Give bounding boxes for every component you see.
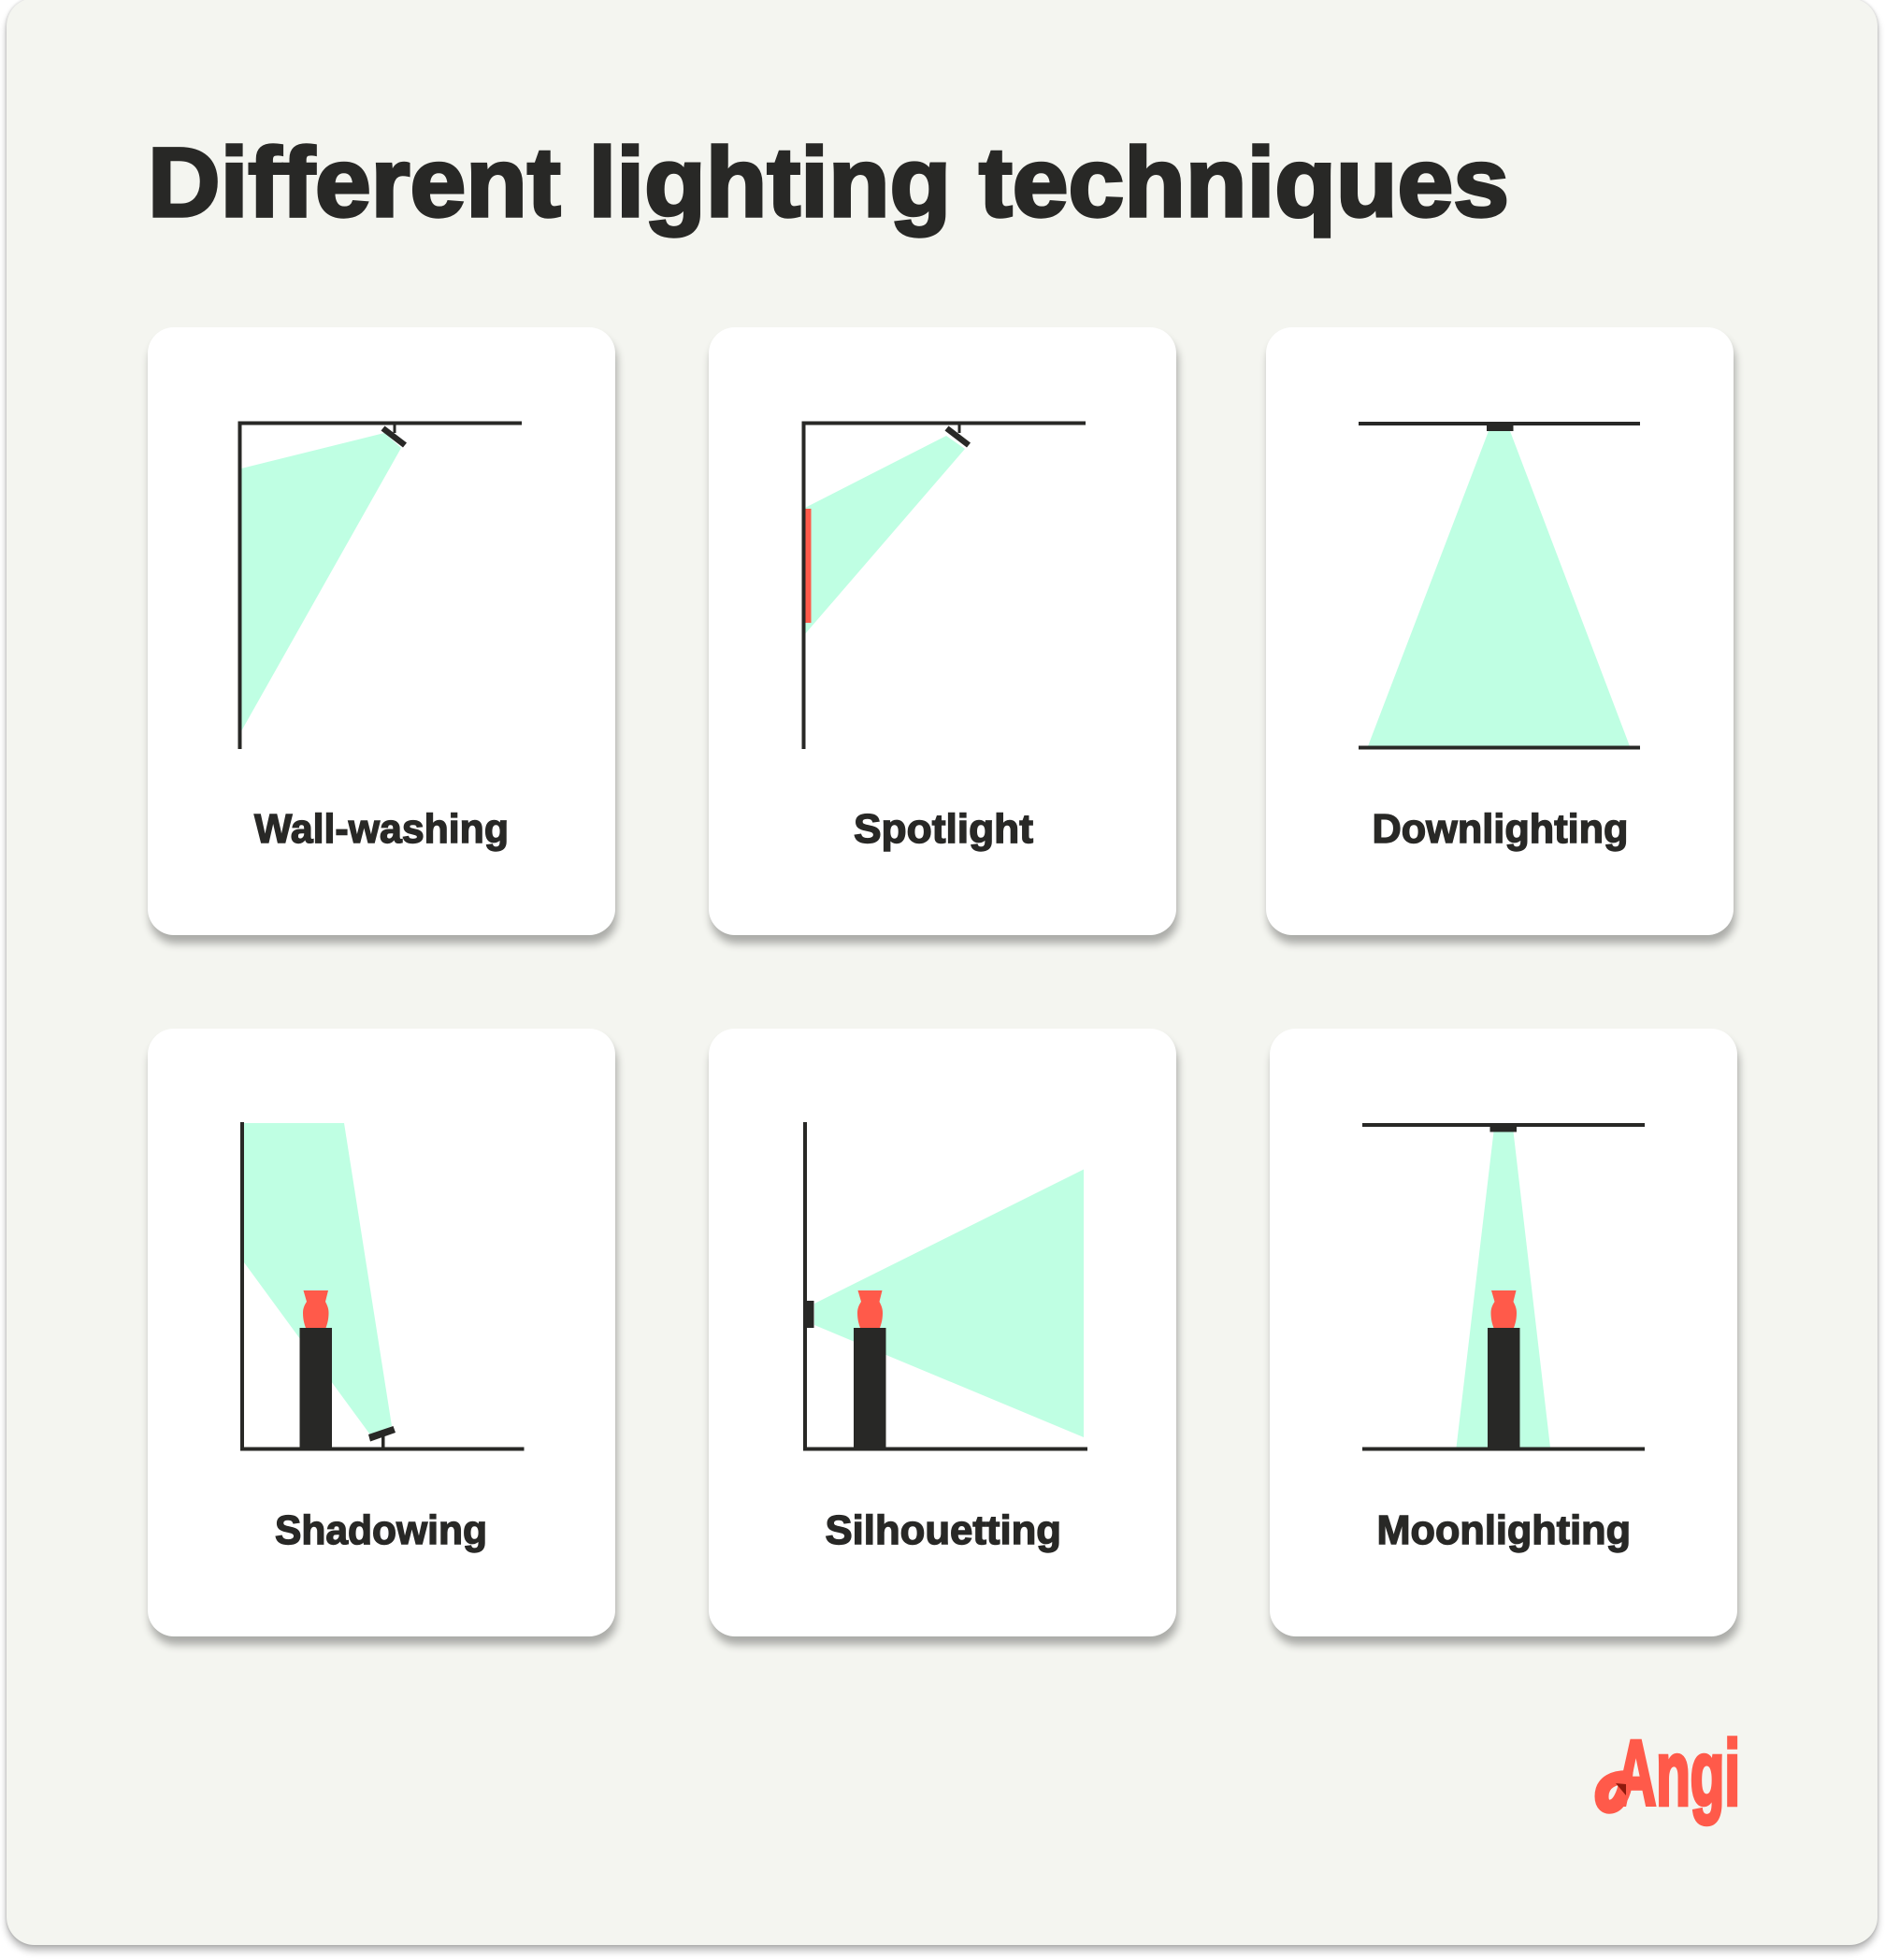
wall fixture (806, 1301, 813, 1328)
label: Wall-washing (254, 806, 509, 852)
light beam (1368, 431, 1630, 746)
floor line (1359, 746, 1640, 750)
wall and ceiling (237, 421, 522, 749)
ceiling fixture (1487, 425, 1513, 431)
floor fixture (368, 1426, 396, 1448)
panel: moonlighting card (1270, 1029, 1737, 1636)
title: Different lighting techniques (148, 128, 1509, 238)
floor line (1362, 1448, 1645, 1451)
label: Downlighting (1373, 806, 1629, 852)
panel: downlighting card (1266, 327, 1734, 935)
logo wordmark: Angi (1616, 1722, 1740, 1824)
wall-mounted fixture (381, 425, 407, 447)
light beam (241, 433, 401, 731)
pedestal (1488, 1328, 1520, 1448)
vase (303, 1290, 329, 1328)
vase (857, 1290, 883, 1328)
label: Moonlighting (1376, 1507, 1631, 1553)
wall and ceiling (802, 421, 1086, 749)
ceiling line (1359, 422, 1640, 425)
highlighted wall object (806, 509, 812, 623)
ceiling fixture (1490, 1126, 1517, 1131)
panel: shadowing card (148, 1029, 615, 1636)
label: Silhouetting (825, 1507, 1061, 1553)
label: Spotlight (854, 806, 1033, 852)
pedestal (854, 1328, 886, 1448)
light beam (1457, 1131, 1550, 1448)
logo: Angi (1595, 1722, 1740, 1827)
light beam (244, 1123, 392, 1435)
panel: spotlight card (709, 327, 1176, 935)
light beam (805, 436, 965, 634)
ceiling fixture (944, 425, 971, 447)
panel: wall-washing card (148, 327, 615, 935)
pedestal (299, 1328, 332, 1448)
light beam (814, 1169, 1084, 1437)
panel: silhouetting card (709, 1029, 1176, 1636)
logo swash (1602, 1778, 1633, 1807)
logo swash overlap (1616, 1783, 1626, 1795)
wall and floor (803, 1122, 1087, 1451)
vase (1490, 1290, 1517, 1328)
wall and floor (240, 1122, 524, 1451)
label: Shadowing (275, 1507, 487, 1553)
ceiling line (1362, 1123, 1645, 1127)
